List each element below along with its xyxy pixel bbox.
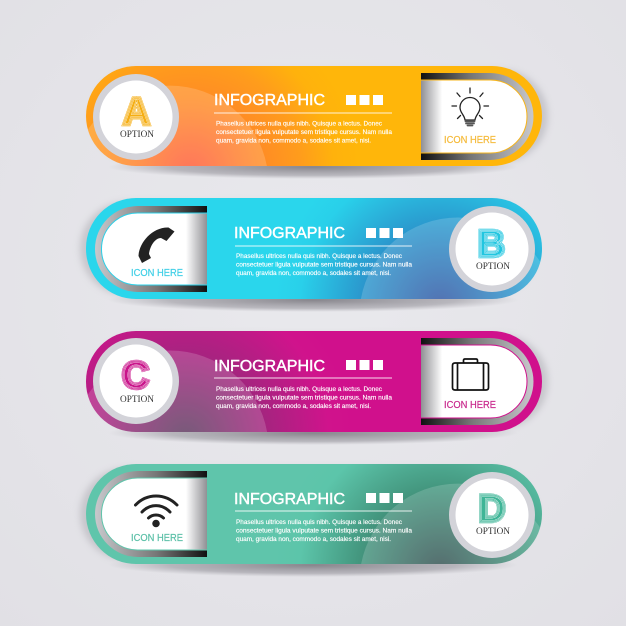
heading rule — [214, 378, 392, 379]
panel: banner D — [80, 464, 555, 577]
letter icon D: D — [478, 488, 506, 530]
icon label: ICON HERE — [444, 400, 496, 411]
panel: banner C — [73, 331, 548, 445]
heading rule — [235, 510, 412, 512]
body text — [236, 253, 412, 277]
body text — [216, 121, 392, 144]
body text: quam, gravida non, commodo a, sodales sit amet, nisi. — [216, 403, 371, 410]
heading: INFOGRAPHIC — [234, 225, 345, 242]
body text: quam, gravida non, commodo a, sodales sit amet, nisi. — [236, 270, 391, 277]
body text: consectetuer ligula vulputate sem tristique cursus. Nam nulla — [236, 262, 412, 268]
body text: Phasellus ultrices nulla quis nibh. Quisque a lectus. Donec — [216, 386, 383, 393]
body text: consectetuer ligula vulputate sem tristique cursus. Nam nulla — [236, 528, 412, 534]
letter icon A: A — [123, 91, 150, 133]
icon window — [421, 338, 534, 425]
letter icon C: C — [122, 355, 149, 397]
body text: quam, gravida non, commodo a, sodales sit amet, nisi. — [236, 536, 391, 543]
body text: Phasellus ultrices nulla quis nibh. Quisque a lectus. Donec — [236, 253, 403, 260]
highlight arc — [361, 484, 555, 564]
heading rule — [235, 246, 412, 247]
panel: banner B — [80, 198, 555, 312]
side shadow — [80, 468, 536, 560]
heading: INFOGRAPHIC — [234, 491, 345, 508]
icon window — [95, 471, 207, 557]
highlight arc — [361, 218, 555, 299]
body text — [216, 386, 392, 410]
highlight arc — [73, 86, 267, 166]
icon: light bulb — [452, 88, 488, 126]
letter icon C: C — [122, 355, 149, 397]
letter icon A: A — [123, 91, 150, 133]
three squares — [366, 228, 403, 238]
body text: consectetuer ligula vulputate sem tristique cursus. Nam nulla — [216, 394, 392, 402]
icon label: ICON HERE — [131, 268, 183, 279]
body text — [236, 519, 412, 543]
option label: OPTION — [120, 129, 155, 139]
heading: INFOGRAPHIC — [214, 358, 325, 375]
icon window — [95, 206, 207, 292]
option label: OPTION — [120, 394, 155, 404]
three squares — [366, 493, 403, 503]
floor shadow — [108, 155, 518, 179]
floor shadow — [108, 421, 518, 445]
option circle — [449, 472, 535, 558]
side shadow — [80, 202, 536, 295]
letter icon B: B — [478, 223, 505, 265]
option circle — [93, 74, 179, 160]
pill body — [86, 198, 542, 299]
icon label: ICON HERE — [131, 533, 183, 544]
letter icon C: C — [122, 355, 149, 397]
side shadow — [92, 335, 548, 428]
letter icon B: B — [478, 223, 505, 265]
letter icon D: D — [478, 488, 506, 530]
letter icon B: B — [478, 223, 505, 265]
letter icon D: D — [478, 488, 506, 530]
body text: Phasellus ultrices nulla quis nibh. Quisque a lectus. Donec — [236, 519, 403, 526]
body text: Phasellus ultrices nulla quis nibh. Quisque a lectus. Donec — [216, 121, 383, 128]
icon: telephone — [138, 227, 174, 263]
pill body — [86, 66, 542, 166]
letter icon C: C — [122, 355, 149, 397]
letter icon A: A — [123, 91, 150, 133]
option circle — [93, 338, 179, 424]
panel: banner A — [73, 66, 548, 179]
icon window — [421, 73, 534, 160]
icon: briefcase — [452, 359, 488, 390]
heading rule — [214, 112, 392, 114]
heading: INFOGRAPHIC — [214, 92, 325, 109]
letter icon D: D — [478, 488, 506, 530]
pill body — [86, 464, 542, 564]
option label: OPTION — [476, 526, 511, 536]
letter icon A: A — [123, 91, 150, 133]
letter icon B: B — [478, 223, 505, 265]
floor shadow — [108, 288, 518, 312]
body text: consectetuer ligula vulputate sem tristique cursus. Nam nulla — [216, 129, 392, 136]
icon: wifi — [136, 496, 177, 526]
side shadow — [92, 70, 548, 162]
option label: OPTION — [476, 261, 511, 271]
pill body — [86, 331, 542, 432]
body text: quam, gravida non, commodo a, sodales sit amet, nisi. — [216, 138, 371, 144]
icon label: ICON HERE — [444, 135, 496, 146]
three squares — [346, 95, 383, 105]
highlight arc — [73, 351, 267, 432]
option circle — [449, 206, 535, 292]
floor shadow — [108, 553, 518, 577]
three squares — [346, 360, 383, 370]
